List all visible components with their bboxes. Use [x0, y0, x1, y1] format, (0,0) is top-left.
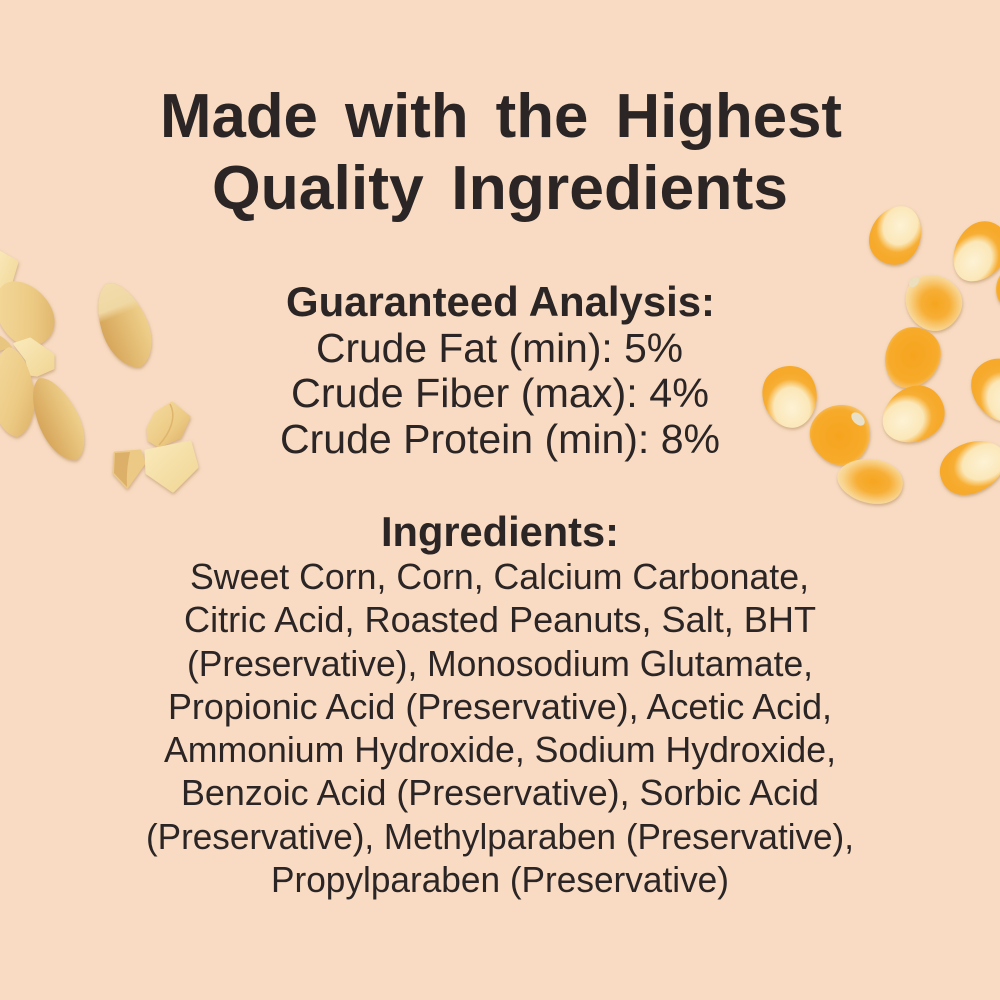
- peanut half upper: [0, 269, 65, 357]
- peanut chunk right: [148, 403, 189, 446]
- ingredients list: Citric Acid, Roasted Peanuts, Salt, BHT: [184, 599, 816, 640]
- peanut chunk small: [114, 451, 144, 487]
- ingredients list: Propionic Acid (Preservative), Acetic Acid,: [168, 686, 832, 727]
- illustration: corn kernels: [758, 197, 1000, 508]
- heading: ingredients: Ingredients:: [381, 508, 619, 555]
- kernel 9: [932, 430, 1000, 504]
- ingredients list: [146, 556, 854, 900]
- kernel 11: [996, 270, 1000, 306]
- crude fat: Crude Fat (min): 5%: [316, 325, 683, 371]
- peanut shard top: [0, 250, 17, 300]
- kernel 8: [834, 454, 906, 508]
- ingredients list: Propylparaben (Preservative): [271, 859, 729, 900]
- peanut left: [0, 345, 38, 439]
- ingredients list: Ammonium Hydroxide, Sodium Hydroxide,: [164, 729, 836, 770]
- kernel 1: [861, 197, 931, 273]
- heading: guaranteed analysis: Guaranteed Analysis:: [286, 278, 715, 325]
- kernel 7: [872, 376, 954, 454]
- kernel 10: [961, 349, 1000, 433]
- title: Made with the Highest: [160, 82, 842, 151]
- peanut chunk large: [146, 442, 197, 491]
- peanut fragment: [0, 334, 12, 352]
- kernel 2: [941, 211, 1000, 293]
- ingredients list: Benzoic Acid (Preservative), Sorbic Acid: [181, 772, 819, 813]
- text block: ingredients: [146, 508, 854, 900]
- crude fiber: Crude Fiber (max): 4%: [291, 370, 709, 416]
- crude protein: Crude Protein (min): 8%: [280, 416, 720, 462]
- peanut whole centre: [86, 275, 162, 375]
- peanut long: [21, 370, 95, 468]
- kernel 3: [893, 263, 973, 341]
- title: [160, 82, 842, 223]
- title: Quality Ingredients: [212, 154, 788, 223]
- text block: guaranteed analysis: [280, 278, 720, 462]
- ingredients list: Sweet Corn, Corn, Calcium Carbonate,: [190, 556, 809, 597]
- kernel 6: [799, 392, 883, 476]
- illustration: peanuts: [0, 250, 197, 491]
- peanut chunk: [15, 339, 53, 375]
- kernel 5: [758, 362, 822, 432]
- ingredients list: (Preservative), Methylparaben (Preservative),: [146, 816, 854, 857]
- kernel 4: [874, 318, 950, 398]
- ingredients list: (Preservative), Monosodium Glutamate,: [187, 643, 813, 684]
